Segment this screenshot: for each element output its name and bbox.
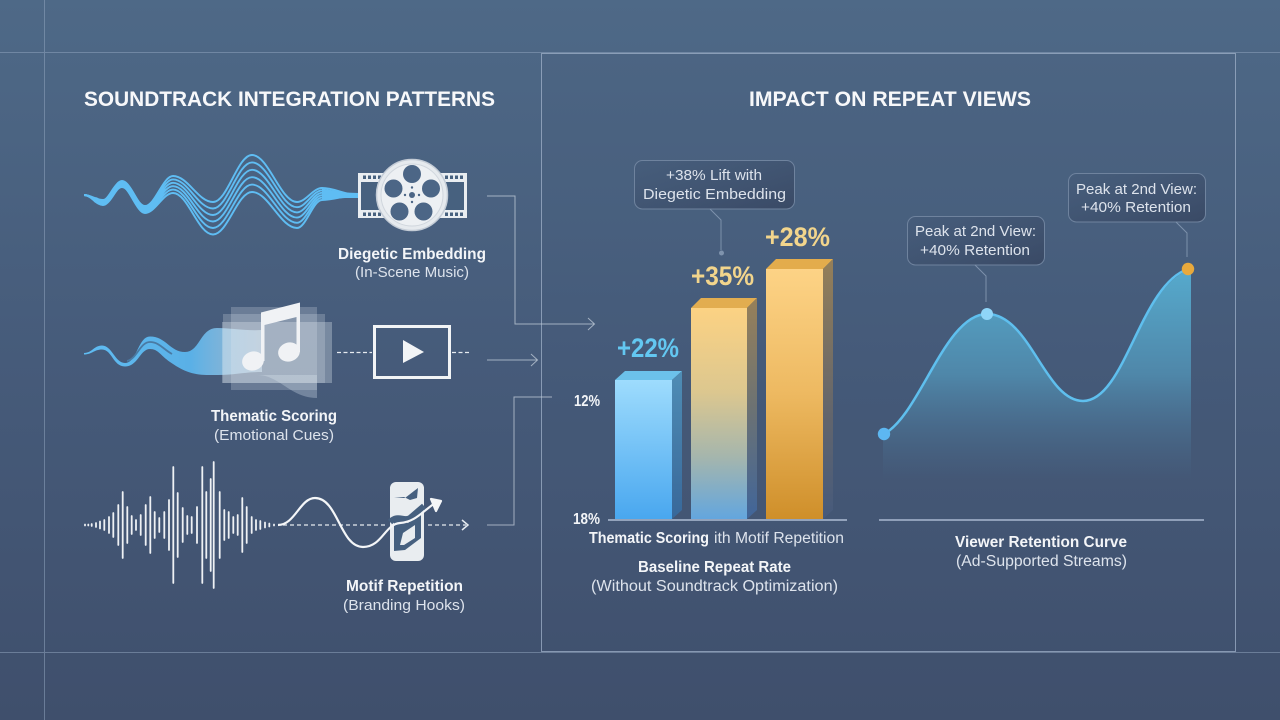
area fill (883, 269, 1191, 480)
label: motif repetition: (Branding Hooks) (343, 597, 465, 614)
dashed line: thematic left (337, 352, 372, 354)
dashed line: thematic right (452, 352, 470, 354)
bar: motif +28% (765, 222, 833, 519)
label: thematic scoring (211, 408, 337, 444)
data point: first peak (981, 308, 993, 320)
icon: video player (374, 326, 450, 378)
waveform: thematic (84, 328, 262, 375)
label: motif repetition: Motif Repetition (346, 578, 463, 595)
callout: lift with diegetic embedding: +38% Lift with (666, 167, 762, 184)
bar: thematic +22% (615, 333, 682, 519)
axis label: 18%: 18% (573, 511, 600, 528)
axis labels: bar names (589, 530, 844, 547)
icon: layered squares (222, 307, 332, 398)
connector: diegetic to bars (487, 196, 594, 330)
heading: impact on repeat views: IMPACT ON REPEAT VIEWS (749, 88, 1031, 111)
label: thematic scoring: (Emotional Cues) (214, 427, 334, 444)
bar: diegetic +35% (691, 261, 757, 519)
heading: soundtrack integration patterns: SOUNDTRACK INTEGRATION PATTERNS (84, 88, 495, 111)
label: viewer retention curve (955, 534, 1127, 570)
label: diegetic embedding (338, 246, 486, 281)
pattern: motif repetition (85, 462, 468, 614)
pattern: diegetic embedding (84, 155, 486, 281)
label: thematic scoring: Thematic Scoring (211, 408, 337, 425)
dashed arrow: motif (283, 520, 468, 530)
callout: lift with diegetic embedding (634, 160, 794, 256)
callout: first peak: +40% Retention (920, 242, 1030, 259)
bar: diegetic +35%: +35% (691, 261, 754, 291)
panel: impact on repeat views (542, 54, 1236, 652)
axis labels: bar names: ith Motif Repetition (714, 530, 844, 547)
callout: first peak (908, 216, 1044, 302)
data point: second peak (1182, 263, 1194, 275)
callout: second peak: +40% Retention (1081, 199, 1191, 216)
callout: second peak (1068, 174, 1206, 257)
callout: lift with diegetic embedding: Diegetic Embedding (643, 186, 786, 203)
pattern: thematic scoring (84, 302, 470, 444)
data point: start (878, 428, 890, 440)
waveform: diegetic (84, 155, 358, 234)
waveform: motif (85, 462, 274, 588)
label: diegetic embedding: Diegetic Embedding (338, 246, 486, 263)
label: diegetic embedding: (In-Scene Music) (355, 264, 469, 281)
line chart: viewer retention curve (878, 263, 1204, 570)
connector: thematic to panel (487, 354, 538, 366)
label: viewer retention curve: Viewer Retention Curve (955, 534, 1127, 551)
icon: film reel (358, 160, 467, 230)
label: motif repetition (343, 578, 465, 614)
curve (884, 269, 1188, 434)
icon: music note (240, 302, 302, 373)
callout: first peak: Peak at 2nd View: (915, 223, 1036, 240)
label: baseline repeat rate (591, 559, 838, 595)
label: baseline repeat rate: Baseline Repeat Rate (638, 559, 791, 576)
bar chart: repeat rate lift (573, 222, 847, 595)
label: baseline repeat rate: (Without Soundtrack Optimization) (591, 578, 838, 595)
axis label: 12%: 12% (574, 393, 600, 410)
connector: motif to 12% (487, 397, 552, 525)
bar: thematic +22%: +22% (617, 333, 679, 363)
label: viewer retention curve: (Ad-Supported Streams) (956, 553, 1127, 570)
curve arrow: motif (278, 498, 441, 547)
icon: branded phone (390, 482, 424, 561)
axis labels: bar names: Thematic Scoring (589, 530, 709, 547)
callout: second peak: Peak at 2nd View: (1076, 181, 1197, 198)
bar: motif +28%: +28% (765, 222, 830, 252)
